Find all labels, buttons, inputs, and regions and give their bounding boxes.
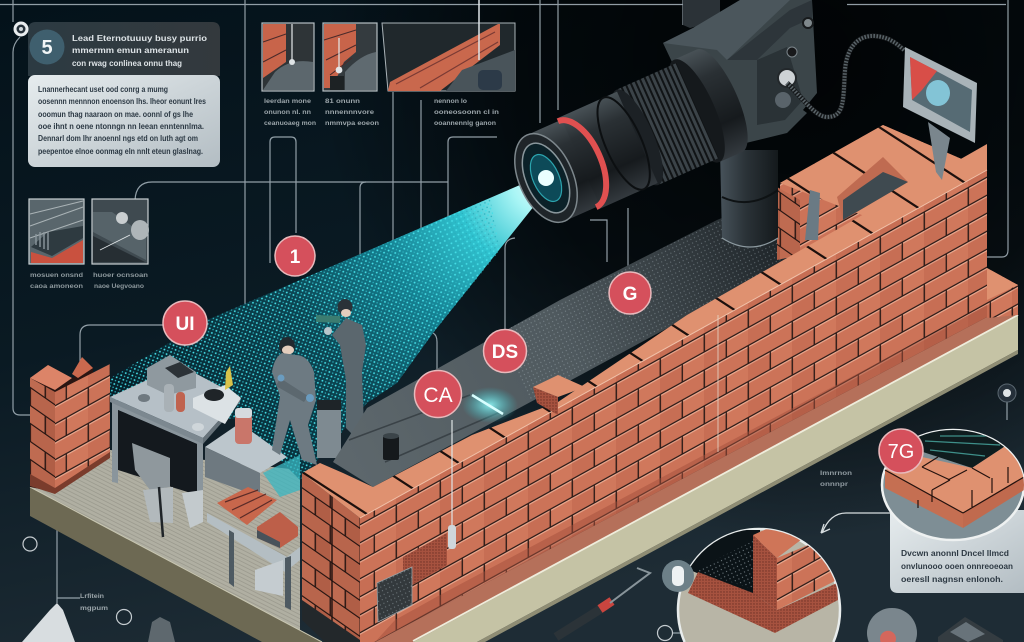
tool: bottle — [148, 617, 175, 642]
glowing device — [462, 387, 518, 423]
thumbnail captions: mosuen onsnd — [30, 272, 83, 279]
body — [663, 0, 817, 150]
thumbnail: brick corner one — [262, 23, 314, 91]
workbench — [110, 355, 300, 537]
monitor — [903, 47, 977, 180]
thumbnail captions: top row: ooannennlg ganon — [434, 120, 496, 127]
lens barrel — [499, 42, 759, 240]
thumbnail captions: top row: nennon lo — [434, 98, 467, 105]
thumbnail captions: top row — [264, 98, 499, 127]
thumbnail: brick corner two — [323, 23, 377, 91]
worker: bending — [272, 337, 341, 465]
panel heading: Lead Eternotuuuy busy purrio — [72, 33, 207, 43]
thumbnail captions: naoe Uegvoano — [94, 283, 144, 290]
numbered marker: 7G: 7G — [888, 441, 914, 463]
post — [683, 0, 778, 248]
number badge — [30, 30, 64, 64]
panel body — [28, 75, 220, 167]
brick wall — [302, 144, 1018, 642]
pin icon — [998, 384, 1016, 402]
numbered marker: CA — [414, 370, 462, 418]
numbered marker: 7G — [879, 429, 923, 473]
stripe on slab — [349, 395, 500, 462]
bench top — [110, 372, 240, 438]
thumbnail captions: top row: ooneosoonn cl in — [434, 109, 499, 116]
tool: screwdriver — [556, 605, 607, 637]
panel heading — [72, 33, 207, 68]
detail circle: 7G brick stack — [882, 430, 1024, 540]
tool: lamp — [22, 603, 75, 642]
thumbnail captions: top row: Ieerdan mone — [264, 98, 311, 105]
arrow: to detail circle — [821, 513, 890, 533]
note box: onvlunooo ooen onnreoeoan — [901, 562, 1013, 571]
thumbnail captions: huoer ocnsoan — [93, 272, 148, 279]
cable — [787, 36, 904, 117]
lamp label — [80, 593, 108, 612]
lamp label: mgpum — [80, 605, 108, 612]
top edge highlight — [360, 170, 987, 518]
thumbnail captions: caoa amoneon — [30, 283, 83, 290]
panel body text: Lnannerhecant uset ood conrg a mumg — [38, 85, 168, 94]
note box: Dvcwn anonnl Dncel llmcd — [901, 549, 1009, 558]
numbered marker: CA: CA — [423, 384, 453, 407]
panel heading: mmermm emun ameranun — [72, 45, 189, 55]
panel heading: con rwag conlinea onnu thag — [72, 58, 182, 68]
damaged bricks — [403, 533, 447, 590]
thumbnail: sloped brick — [382, 0, 515, 91]
tool: device — [938, 617, 1003, 642]
wall end section — [987, 268, 1018, 318]
wall base band — [375, 305, 987, 642]
label: small note: Imnrnon — [820, 470, 852, 477]
panel body text: ooe ihnt n oene ntonngn nn Ieean enntennlma. — [38, 122, 204, 131]
thumbnail captions: top row: ceanuoaeg mon — [264, 120, 316, 127]
note box — [890, 510, 1024, 593]
loose stone — [533, 387, 558, 415]
marker: top left — [14, 22, 28, 36]
dust on slab — [500, 195, 785, 400]
tower left side — [777, 187, 800, 260]
lamp label: Lrfitein — [80, 593, 104, 600]
panel body text: oosennn mennnon enoenson Ihs. Iheor eonunt Ires — [38, 97, 207, 106]
thumbnail captions — [30, 272, 148, 290]
thumbnail captions: top row: 81 onunn — [325, 98, 360, 105]
low table with bricks — [207, 487, 300, 610]
lamp line and capsule — [451, 420, 453, 530]
numbered marker: G — [609, 272, 651, 314]
note box: oeresll nagnsn enlonoh. — [901, 575, 1003, 584]
thumbnail captions: top row: nmmvpa eoeon — [325, 120, 379, 127]
worker: standing with tool — [316, 299, 366, 434]
numbered marker: G: G — [623, 284, 637, 305]
small cylinder — [383, 433, 399, 460]
brick column left — [30, 357, 110, 494]
wall crack — [717, 315, 719, 452]
drip — [805, 190, 820, 240]
gray wall top slab — [333, 190, 790, 487]
inside of tower — [837, 157, 908, 220]
wall front face — [360, 170, 987, 642]
tool: glass orb — [867, 608, 917, 642]
pin icon: detail circle — [662, 560, 694, 592]
top bricks — [302, 144, 987, 518]
bag under bench — [132, 443, 170, 490]
label: small note — [820, 470, 852, 488]
second cabinet — [205, 423, 287, 473]
thumbnail: droplet detail — [92, 199, 149, 264]
bench legs and shelf — [112, 400, 203, 500]
numbered marker: 1 — [275, 236, 315, 276]
panel body text: Dennarl dom Ihr anoennl ngs etd on Iuth agt om — [38, 134, 198, 143]
floor slab left — [30, 450, 322, 642]
detail circle: brick corner — [678, 523, 840, 642]
tower — [777, 125, 987, 300]
numbered marker: UI — [163, 301, 207, 345]
lens flare — [538, 170, 554, 186]
thumbnail captions: top row: onunon nI. nn — [264, 109, 311, 116]
panel header — [28, 22, 220, 76]
numbered marker: DS — [484, 330, 526, 372]
camera — [499, 0, 817, 248]
small circled icons — [23, 537, 672, 640]
wall vent — [377, 567, 412, 622]
label: small note: onnnpr — [820, 481, 849, 488]
thumbnail captions: top row: nnnennnvore — [325, 109, 374, 116]
numbered marker: 1: 1 — [290, 247, 301, 268]
panel body text — [38, 85, 207, 156]
panel body text: ooomun thag naaraon on mae. oonnl of gs Ihe — [38, 110, 194, 119]
number badge: 5 — [41, 37, 53, 59]
numbered marker: UI: UI — [176, 314, 194, 335]
bottom tools — [22, 568, 1003, 642]
thumbnail: surface detail — [29, 199, 84, 264]
base strip — [413, 315, 1018, 642]
light beam with dots — [102, 172, 550, 480]
machine on bench — [147, 355, 196, 395]
panel body text: peepentoe elnoe oonmag eln nnlt eteun glaslnag. — [38, 147, 203, 156]
numbered marker: DS: DS — [492, 342, 518, 363]
panel: intro text — [14, 22, 220, 167]
wall left face — [302, 473, 360, 642]
connector — [775, 92, 791, 108]
